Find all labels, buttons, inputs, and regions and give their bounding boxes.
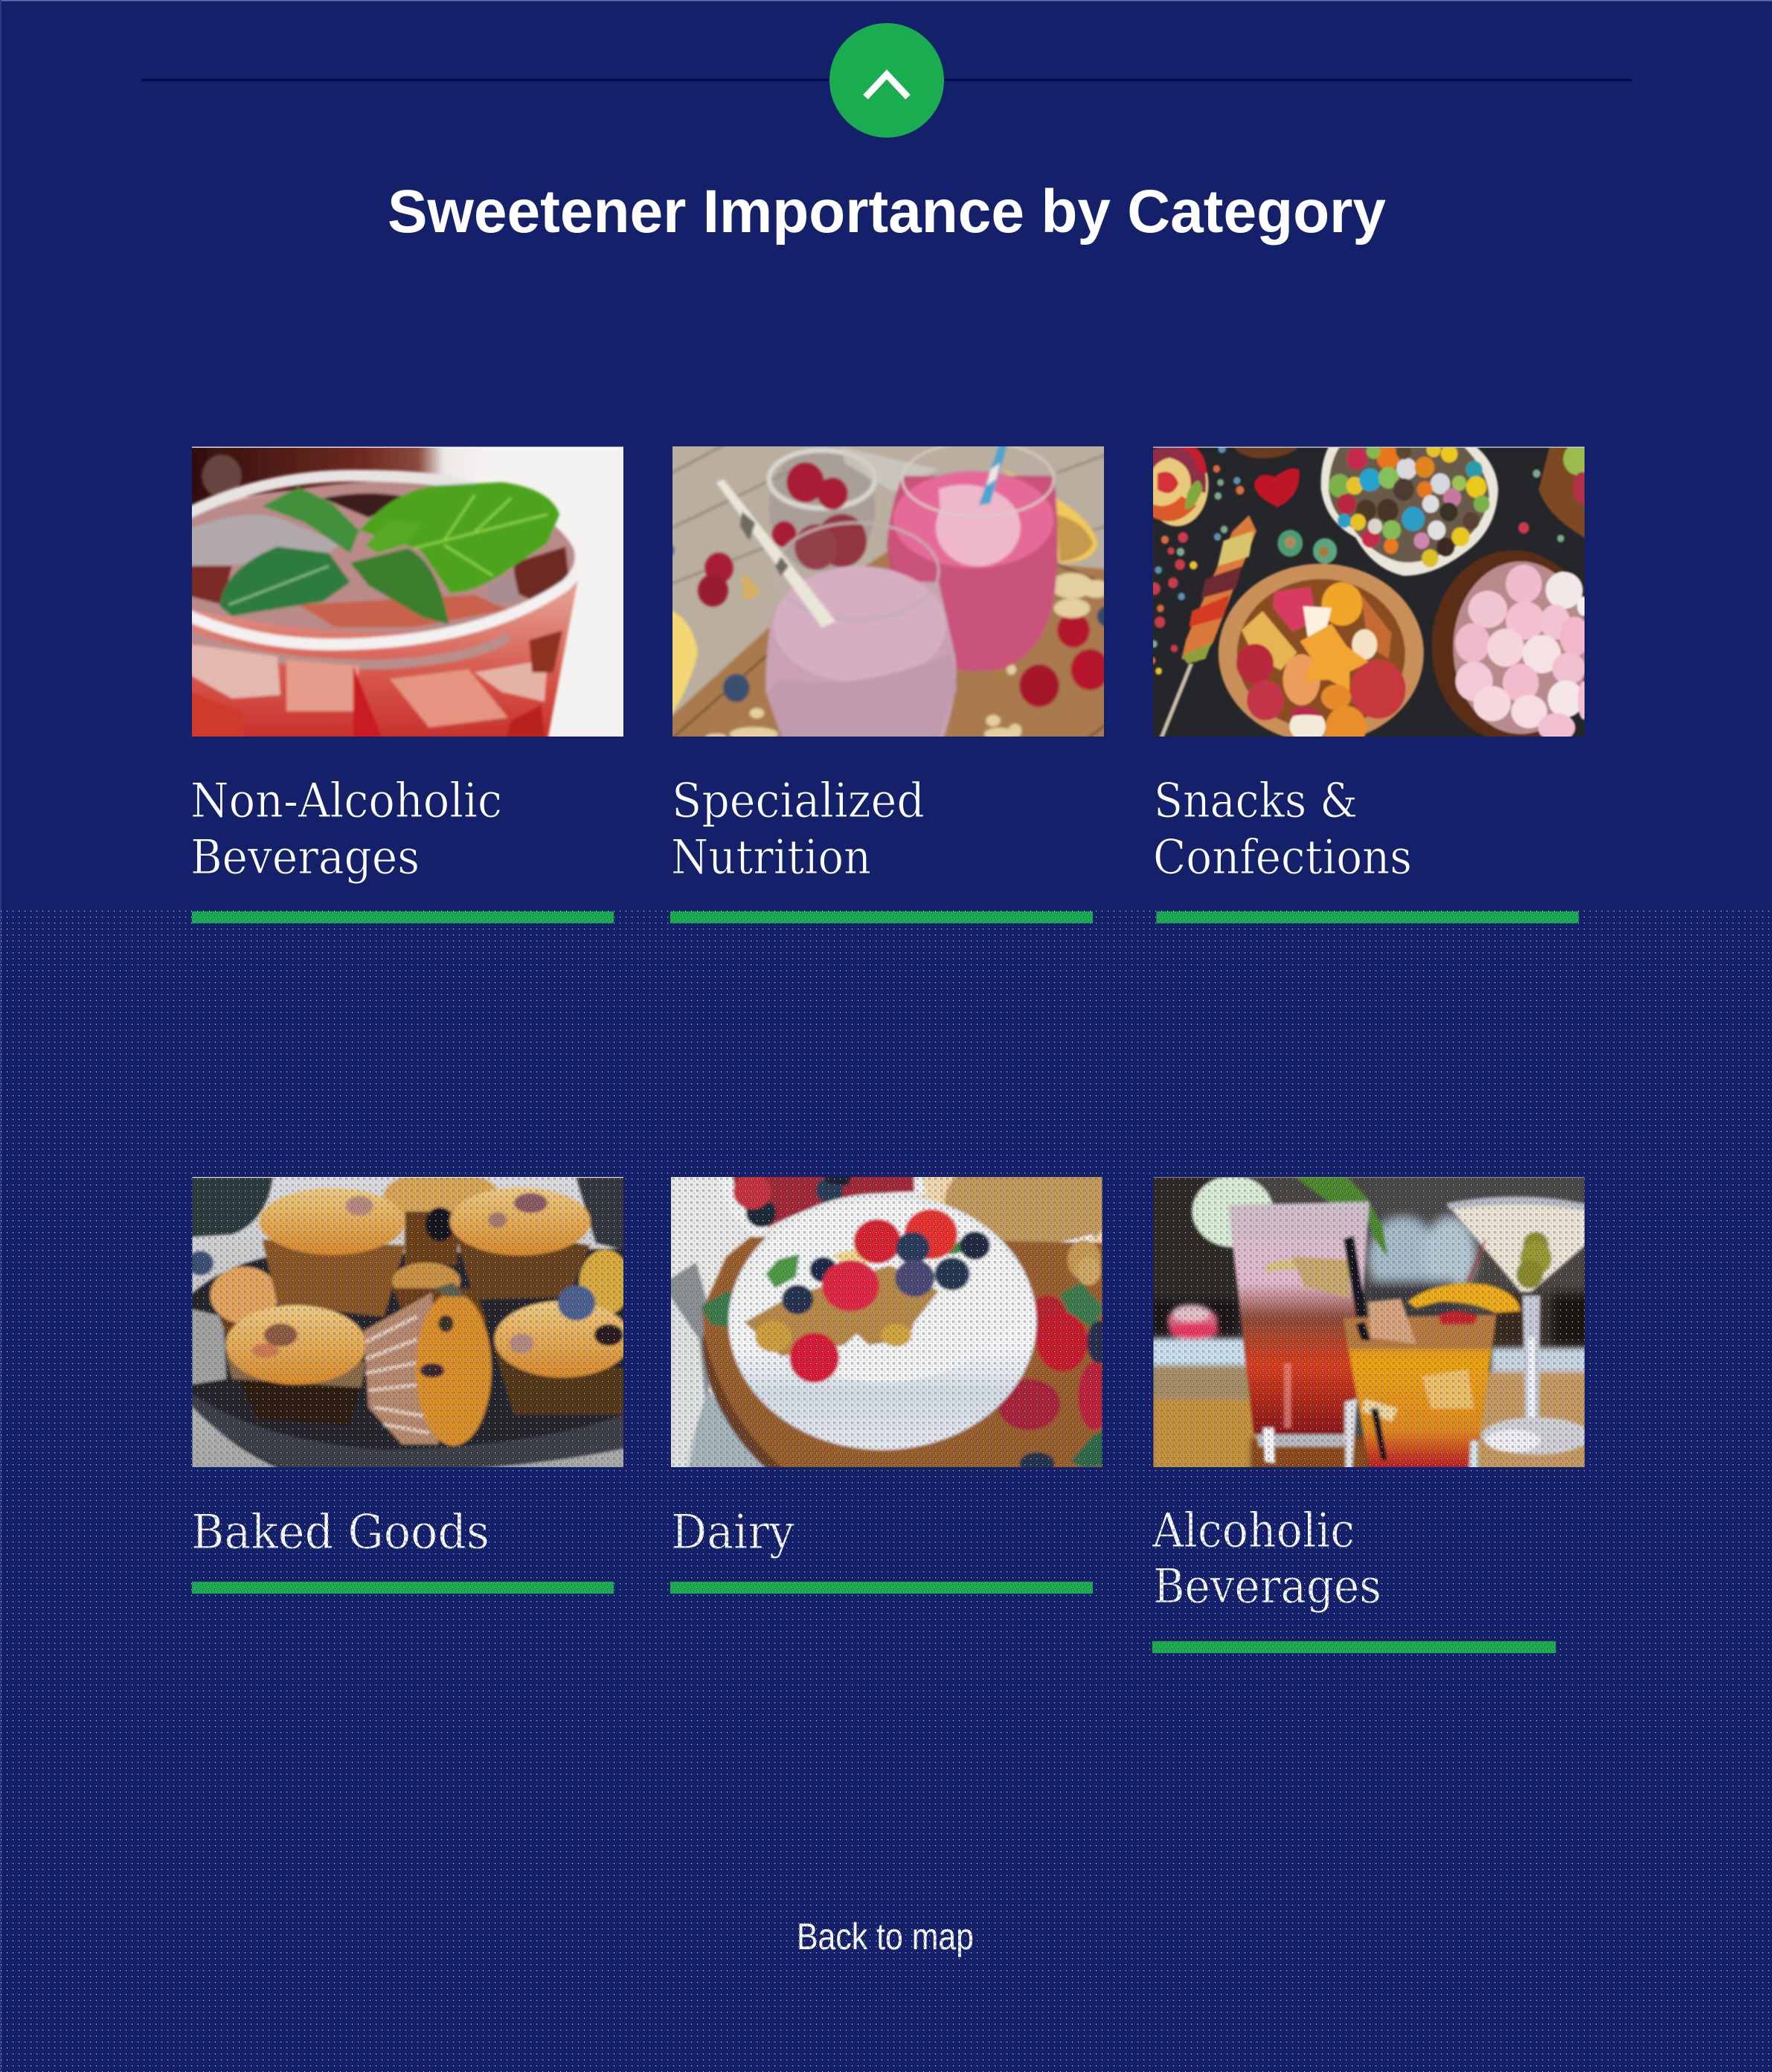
photo: candy bowls: [1153, 446, 1585, 737]
photo: berry smoothies: [672, 446, 1104, 737]
category label: Nutrition: [671, 830, 871, 885]
panel: Alcoholic Beverages: [1138, 1167, 1600, 1653]
icon: back to top chevron button: [829, 23, 944, 138]
photo: cocktails: [1153, 1177, 1585, 1467]
green bar: [1152, 1641, 1556, 1653]
green bar: [670, 911, 1093, 923]
category label: [1152, 1504, 1381, 1614]
green bar: [670, 1582, 1093, 1594]
green bar: [1156, 911, 1579, 923]
photo: yogurt bowl with berries: [671, 1177, 1102, 1467]
panel: Non-Alcoholic Beverages: [178, 438, 623, 923]
title: Sweetener Importance by Category: [388, 178, 1386, 246]
panel: Baked Goods: [186, 1170, 632, 1594]
category label: Baked Goods: [191, 1505, 489, 1560]
category label: Beverages: [190, 830, 420, 885]
photo: red iced drink with mint: [192, 446, 623, 737]
green bar: [192, 1582, 614, 1594]
category label: Confections: [1153, 830, 1412, 885]
category label: [671, 774, 925, 885]
panel: Dairy: [664, 1149, 1114, 1594]
category label: Non-Alcoholic: [190, 774, 502, 829]
category label: Beverages: [1153, 1559, 1381, 1614]
category label: [1153, 774, 1412, 885]
panel: Snacks & Confections: [1146, 442, 1595, 923]
category label: Specialized: [672, 774, 925, 829]
category label: [190, 774, 502, 885]
green bar: [192, 911, 614, 923]
category label: Dairy: [671, 1505, 794, 1560]
panel: Specialized Nutrition: [661, 440, 1117, 923]
photo: blueberry muffins: [192, 1177, 623, 1467]
category label: Snacks &: [1154, 774, 1358, 829]
category label: Alcoholic: [1152, 1504, 1355, 1559]
link: back to map: Back to map: [797, 1916, 974, 1957]
